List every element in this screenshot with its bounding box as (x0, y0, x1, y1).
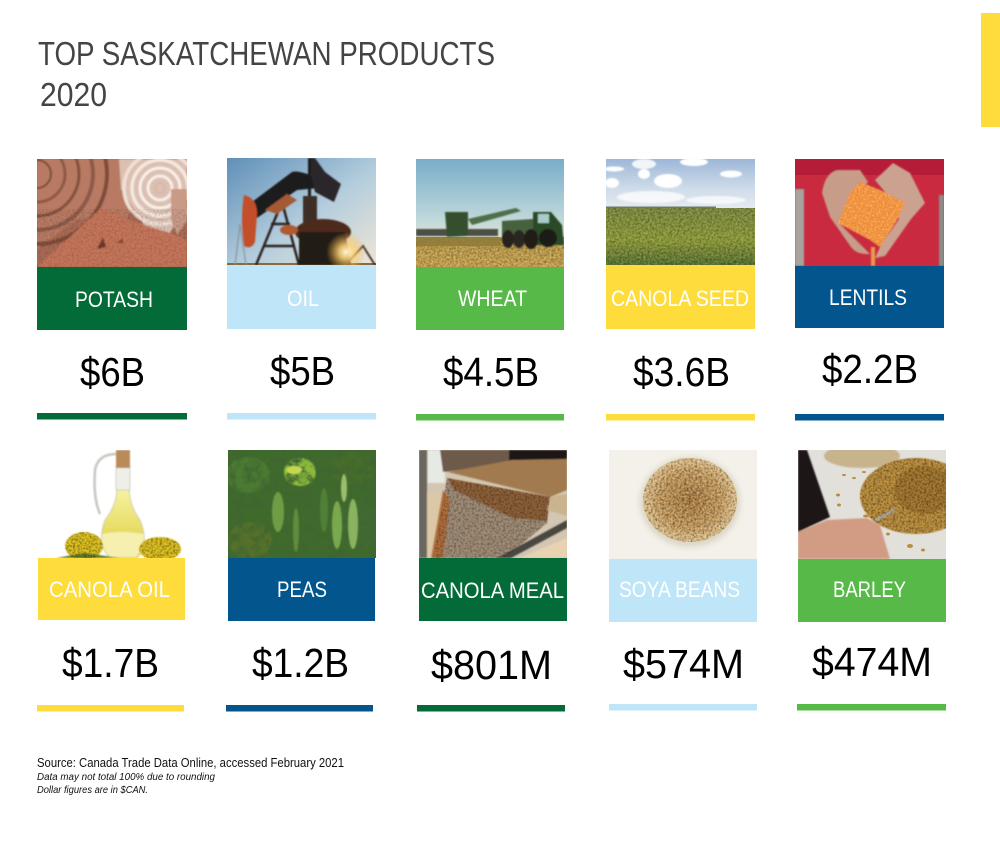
label text: canola seed: CANOLA SEED (611, 286, 749, 311)
colour bar: canola oil (37, 705, 184, 712)
value: canola meal: $801M (431, 642, 552, 688)
value: wheat: $4.5B (443, 349, 539, 395)
title: 2020 (40, 76, 107, 113)
label: canola meal (419, 558, 567, 621)
label: lentils (795, 266, 944, 328)
card: soya beans (609, 450, 757, 710)
card: wheat (416, 159, 564, 420)
label: barley (798, 559, 946, 622)
photo: oil pump jack (227, 158, 376, 265)
source notes: Source: Canada Trade Data Online, accessed February 2021 (37, 756, 344, 770)
label text: peas: PEAS (277, 577, 327, 602)
value: canola seed: $3.6B (633, 349, 730, 395)
card: canola oil (37, 450, 185, 712)
label: soya beans (609, 559, 757, 622)
label: oil (227, 265, 376, 329)
yellow corner tab (981, 13, 1000, 127)
label text: canola oil: CANOLA OIL (49, 577, 170, 602)
label text: wheat: WHEAT (458, 286, 527, 311)
photo: pea plants (228, 450, 376, 558)
source notes: Dollar figures are in $CAN. (37, 785, 148, 796)
card: peas (226, 450, 378, 712)
value: potash: $6B (80, 349, 145, 395)
colour bar: canola meal (417, 705, 565, 712)
label text: canola meal: CANOLA MEAL (421, 578, 564, 603)
label text: potash: POTASH (75, 287, 153, 312)
card: canola meal (417, 450, 567, 712)
title: TOP SASKATCHEWAN PRODUCTS (38, 35, 495, 72)
card: lentils (795, 159, 944, 420)
value: soya beans: $574M (623, 641, 744, 687)
label: canola oil (38, 558, 185, 620)
card: barley (797, 444, 972, 710)
value: lentils: $2.2B (822, 346, 918, 392)
photo: canola meal conveyor (419, 450, 567, 558)
colour bar: oil (227, 413, 376, 420)
title (38, 35, 495, 113)
photo: wheat harvest (416, 159, 564, 267)
label: wheat (416, 267, 564, 330)
card: oil (227, 158, 376, 420)
colour bar: barley (797, 704, 946, 710)
card: canola seed (604, 158, 755, 420)
colour bar: peas (226, 705, 373, 712)
photo: soya beans pile (609, 450, 757, 559)
value: canola oil: $1.7B (62, 640, 159, 686)
value: oil: $5B (270, 348, 335, 394)
photo: canola field (606, 159, 755, 265)
colour bar: lentils (795, 414, 944, 420)
colour bar: canola seed (606, 414, 755, 420)
label: potash (37, 267, 187, 330)
photo: hands holding lentils (795, 159, 944, 266)
photo: barley grains and hand (798, 450, 946, 559)
label text: barley: BARLEY (833, 577, 906, 602)
card: potash (0, 104, 196, 420)
photo: canola oil jug (56, 450, 182, 558)
label: canola seed (606, 265, 755, 329)
colour bar: potash (37, 413, 187, 420)
photo: potash mine (37, 159, 187, 267)
label text: oil: OIL (287, 286, 319, 311)
value: barley: $474M (812, 639, 932, 685)
source notes: Data may not total 100% due to rounding (37, 772, 215, 783)
value: peas: $1.2B (252, 640, 349, 686)
source notes (37, 756, 344, 796)
label text: soya beans: SOYA BEANS (619, 577, 740, 602)
label: peas (228, 558, 375, 621)
colour bar: soya beans (609, 704, 757, 710)
label text: lentils: LENTILS (829, 285, 907, 310)
colour bar: wheat (416, 414, 564, 420)
